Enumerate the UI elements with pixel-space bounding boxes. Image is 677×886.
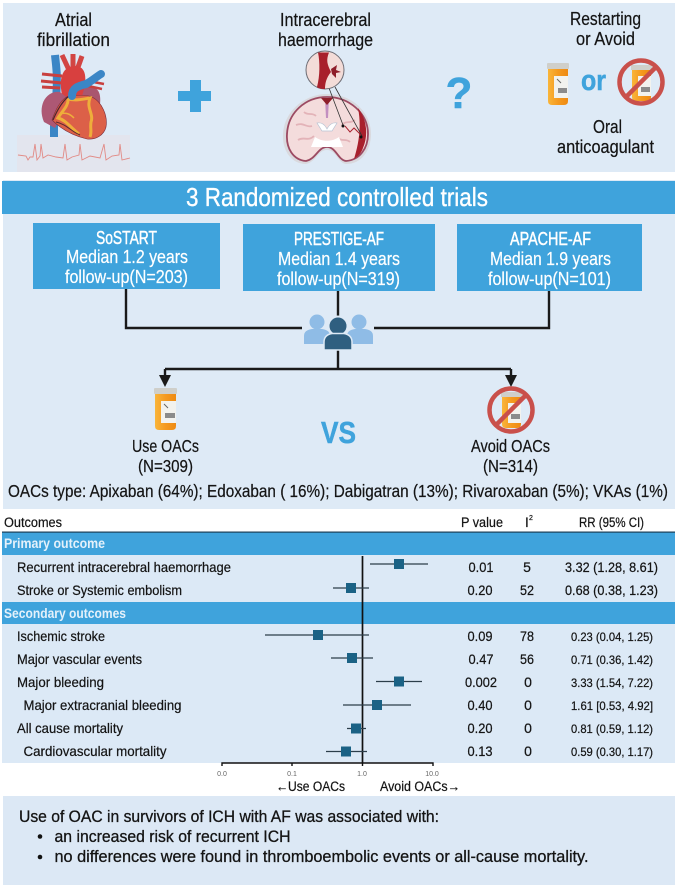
outcome labels: Stroke or Systemic embolism xyxy=(17,582,182,598)
box: SoSTART: follow-up(N=203) xyxy=(65,267,188,287)
panel: conclusion xyxy=(3,796,675,885)
column: risk ratios: 3.32 (1.28, 8.61) xyxy=(565,560,658,575)
column: P values: 0.20 xyxy=(468,582,493,598)
icon: crossed-out pill bottle xyxy=(620,60,662,104)
label: oral anticoagulant: anticoagulant xyxy=(557,136,654,157)
heading: atrial fibrillation xyxy=(37,9,110,50)
arrow: to avoid OACs xyxy=(505,375,517,387)
icon: brain haemorrhage xyxy=(283,51,371,164)
column: I squared: 56 xyxy=(520,651,534,667)
heading: restarting or avoid xyxy=(570,8,641,49)
label: oral anticoagulant xyxy=(557,116,654,157)
column: I squared: 0 xyxy=(524,674,532,690)
arrow: to use OACs xyxy=(159,375,171,387)
label: avoid OACs: Avoid OACs xyxy=(471,436,550,456)
heading: restarting or avoid: or Avoid xyxy=(576,28,635,49)
table header xyxy=(4,515,644,530)
column: P values xyxy=(465,559,497,759)
column: P values: 0.47 xyxy=(468,651,494,667)
icon: ECG trace xyxy=(17,135,130,172)
box: PRESTIGE-AF: follow-up(N=319) xyxy=(277,269,400,289)
column: risk ratios: 0.59 (0.30, 1.17) xyxy=(571,745,653,759)
column: I squared: 78 xyxy=(520,628,534,644)
column: risk ratios: 1.61 [0.53, 4.92] xyxy=(571,699,653,713)
icon: crossed-out pill bottle, avoid OACs xyxy=(490,388,532,432)
bullet: no differences: no differences were found in thromboembolic events or all-cause mortality. xyxy=(54,847,588,866)
label: avoid OACs xyxy=(471,436,550,476)
icon: heart xyxy=(41,54,106,139)
column: I squared: 0 xyxy=(524,697,532,713)
column: I squared: 0 xyxy=(524,720,532,736)
column: P values: 0.13 xyxy=(468,743,493,759)
column: P values: 0.01 xyxy=(468,559,494,575)
text: conclusion lead: Use of OAC in survivors of ICH with AF was associated with: xyxy=(19,807,439,826)
box: PRESTIGE-AF xyxy=(243,224,435,291)
label: VS: VS xyxy=(321,415,356,450)
chart: forest plot: 0.0 xyxy=(217,771,227,778)
heading: atrial fibrillation: Atrial xyxy=(55,9,92,30)
box: APACHE-AF: follow-up(N=101) xyxy=(488,269,611,289)
box: APACHE-AF: Median 1.9 years xyxy=(490,249,611,269)
column: I squared: 5 xyxy=(523,559,531,575)
chart: forest plot: 0.1 xyxy=(287,771,297,778)
table header: RR (95% CI) xyxy=(579,515,644,530)
outcome labels xyxy=(17,559,231,759)
table header: I xyxy=(525,515,529,530)
heading: intracerebral haemorrhage: Intracerebral xyxy=(280,9,371,30)
outcome labels: Major extracranial bleeding xyxy=(24,697,182,713)
table header: Outcomes xyxy=(4,515,62,530)
heading: restarting or avoid: Restarting xyxy=(570,8,641,29)
column: P values: 0.20 xyxy=(468,720,493,736)
outcome labels: Major bleeding xyxy=(17,674,104,690)
column: risk ratios: 0.81 (0.59, 1.12) xyxy=(571,722,653,736)
column: P values: 0.09 xyxy=(468,628,493,644)
table header: P value xyxy=(461,515,503,530)
connector lines to participants xyxy=(126,289,549,376)
heading bar: randomized controlled trials xyxy=(2,181,675,214)
section bar: primary outcome: Primary outcome xyxy=(4,535,105,551)
outcome labels: Major vascular events xyxy=(17,651,142,667)
column: risk ratios xyxy=(565,560,658,759)
label: use OACs: (N=309) xyxy=(138,456,193,476)
bullet: recurrent ICH: an increased risk of recurrent ICH xyxy=(54,827,290,846)
chart: forest plot: 1.0 xyxy=(357,771,367,778)
column: P values: 0.002 xyxy=(465,674,497,690)
box: PRESTIGE-AF: Median 1.4 years xyxy=(278,249,400,269)
panel: trial design xyxy=(2,180,675,509)
heading: intracerebral haemorrhage: haemorrhage xyxy=(278,29,373,50)
table header: 2 xyxy=(529,515,533,522)
section bar: secondary outcomes: Secondary outcomes xyxy=(4,605,126,621)
icon: question mark: ? xyxy=(446,69,472,118)
outcome labels: Recurrent intracerebral haemorrhage xyxy=(17,559,231,575)
icon: pill bottle, use OACs xyxy=(154,388,177,430)
panel: forest plot xyxy=(2,515,675,794)
section bar: primary outcome xyxy=(2,532,675,555)
heading bar: randomized controlled trials: 3 Randomized controlled trials xyxy=(186,182,488,212)
label: avoid OACs: (N=314) xyxy=(483,456,538,476)
icon: plus xyxy=(178,80,211,112)
box: SoSTART: SoSTART xyxy=(96,228,157,248)
box: PRESTIGE-AF: PRESTIGE-AF xyxy=(294,229,384,249)
panel: clinical question xyxy=(3,3,675,172)
chart: forest plot: Avoid OACs→ xyxy=(380,779,460,794)
box: APACHE-AF xyxy=(457,224,642,291)
icon: participants xyxy=(304,314,373,350)
label: use OACs xyxy=(132,436,199,476)
heading: intracerebral haemorrhage xyxy=(278,9,373,50)
column: I squared: 52 xyxy=(520,582,534,598)
outcome labels: All cause mortality xyxy=(17,720,123,736)
icon: pill bottle xyxy=(547,63,569,105)
section bar: secondary outcomes xyxy=(2,602,675,624)
column: risk ratios: 3.33 (1.54, 7.22) xyxy=(571,676,653,690)
column: risk ratios: 0.68 (0.38, 1.23) xyxy=(565,583,658,598)
label: oral anticoagulant: Oral xyxy=(593,116,622,137)
column: I squared xyxy=(520,559,534,759)
column: risk ratios: 0.23 (0.04, 1.25) xyxy=(571,630,653,644)
label: use OACs: Use OACs xyxy=(132,436,199,456)
outcome labels: Cardiovascular mortality xyxy=(24,743,166,759)
column: P values: 0.40 xyxy=(468,697,493,713)
outcome labels: Ischemic stroke xyxy=(17,628,105,644)
box: APACHE-AF: APACHE-AF xyxy=(510,229,591,249)
chart: forest plot: ←Use OACs xyxy=(276,779,345,794)
heading: atrial fibrillation: fibrillation xyxy=(37,29,110,50)
chart: forest plot xyxy=(217,556,460,794)
column: risk ratios: 0.71 (0.36, 1.42) xyxy=(571,653,653,667)
box: SoSTART: Median 1.2 years xyxy=(66,247,188,267)
box: SoSTART xyxy=(33,223,220,289)
label: or: or xyxy=(581,65,606,97)
chart: forest plot: 10.0 xyxy=(425,771,439,778)
column: I squared: 0 xyxy=(524,743,532,759)
